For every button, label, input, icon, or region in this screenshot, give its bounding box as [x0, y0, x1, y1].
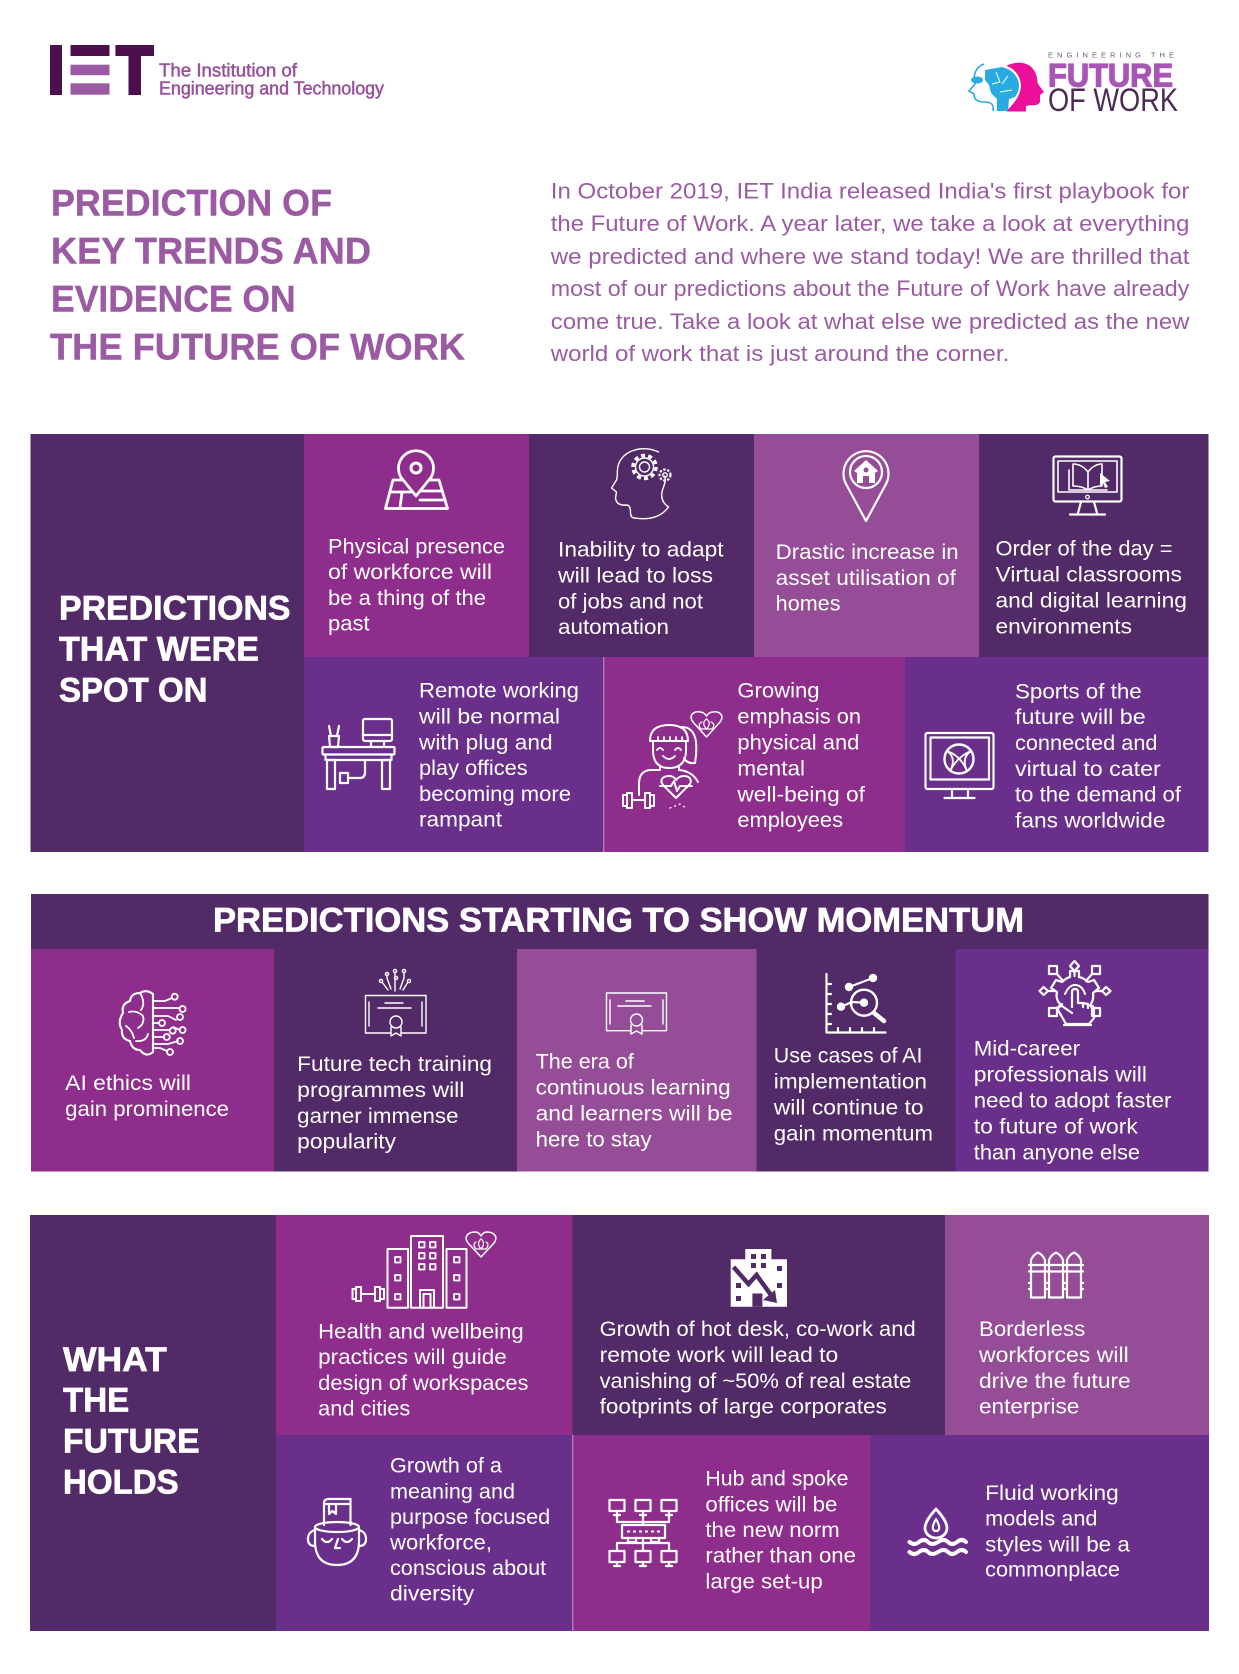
section heading: momentum: PREDICTIONS STARTING TO SHOW MOMENTUM [213, 902, 1024, 940]
icon: buildings with dumbbell and heart [352, 1232, 496, 1308]
card: well-being of employees: emphasis on [737, 706, 861, 729]
card: borderless workforces: enterprise [979, 1395, 1079, 1418]
intro paragraph: most of our predictions about the Future of Work have already [551, 276, 1189, 301]
intro paragraph: come true. Take a look at what else we predicted as the new [551, 309, 1190, 334]
card: continuous learning: The era of [536, 1050, 634, 1073]
card: mid-career professionals: Mid-career [974, 1038, 1080, 1061]
card: future tech training [274, 949, 517, 1172]
card: hub and spoke: Hub and spoke [705, 1468, 848, 1491]
card: hub and spoke [572, 1435, 870, 1631]
title: THE FUTURE OF WORK [50, 326, 465, 368]
card: borderless workforces: workforces will [978, 1344, 1129, 1367]
icon: circuit brain [120, 991, 186, 1055]
section label: future holds: HOLDS [63, 1463, 179, 1501]
card: meaning and purpose: meaning and [390, 1480, 515, 1503]
card: hot desk and co-work: footprints of large corporates [600, 1395, 887, 1418]
section label: spot on [30, 434, 304, 852]
card: hot desk and co-work: remote work will lead to [600, 1344, 838, 1367]
card: inability to adapt: will lead to loss [557, 564, 713, 587]
card: hub and spoke: rather than one [705, 1545, 856, 1568]
title: EVIDENCE ON [51, 278, 296, 320]
intro paragraph: In October 2019, IET India released India's first playbook for [551, 178, 1189, 204]
logo: Engineering the Future of Work: FUTURE [1048, 58, 1173, 94]
card: well-being of employees: mental [737, 757, 805, 780]
icon: building with falling arrow [731, 1249, 787, 1307]
card: hot desk and co-work: vanishing of ~50% of real estate [600, 1370, 911, 1393]
card: hub and spoke: offices will be [705, 1493, 837, 1516]
card: fluid working models: Fluid working [985, 1482, 1119, 1505]
card: remote working: becoming more [419, 783, 571, 806]
card: borderless workforces: Borderless [979, 1318, 1085, 1341]
card: sports of the future: to the demand of [1015, 784, 1181, 807]
card: remote working: play offices [419, 757, 528, 780]
card: inability to adapt: Inability to adapt [558, 539, 724, 562]
icon: gear with hand [1040, 961, 1110, 1025]
card: virtual classrooms: Virtual classrooms [996, 564, 1182, 587]
logo: Engineering the Future of Work: ENGINEERING THE [1048, 50, 1174, 59]
card: asset utilisation: Drastic increase in [776, 541, 959, 564]
card: inability to adapt: automation [558, 616, 669, 639]
intro paragraph: world of work that is just around the corner. [550, 341, 1009, 366]
card: health and wellbeing: design of workspaces [318, 1372, 528, 1395]
card: fluid working models [870, 1435, 1209, 1631]
card: physical presence [304, 434, 529, 657]
icon: monitor with basketball [926, 733, 994, 798]
panel: predictions that were spot on [30, 434, 1208, 852]
logo: IET [50, 45, 384, 99]
icon: certificate [606, 993, 666, 1034]
icon: fence [1029, 1252, 1083, 1298]
card: AI use cases: implementation [774, 1070, 927, 1093]
logo: IET: The Institution of [159, 61, 298, 81]
card: physical presence: Physical presence [328, 535, 505, 558]
card: virtual classrooms: and digital learning [996, 590, 1187, 613]
card: health and wellbeing: practices will guide [318, 1346, 507, 1369]
card: mid-career professionals [956, 949, 1208, 1172]
card: AI use cases: gain momentum [774, 1122, 933, 1145]
card: fluid working models: models and [985, 1508, 1098, 1531]
card: health and wellbeing [276, 1215, 572, 1435]
card: sports of the future: future will be [1015, 706, 1146, 729]
card: physical presence: of workforce will [328, 561, 492, 584]
card: meaning and purpose: diversity [390, 1583, 475, 1606]
title: PREDICTION OF [51, 182, 332, 224]
card: mid-career professionals: than anyone else [974, 1141, 1140, 1164]
card: meaning and purpose [276, 1435, 572, 1631]
card: sports of the future: fans worldwide [1015, 809, 1166, 832]
card: hub and spoke: large set-up [705, 1570, 823, 1593]
card: meaning and purpose: conscious about [390, 1557, 546, 1580]
section label: spot on: THAT WERE [59, 630, 259, 668]
card: fluid working models: styles will be a [985, 1534, 1130, 1557]
card: remote working: with plug and [418, 731, 553, 754]
card: hot desk and co-work [572, 1215, 945, 1435]
section heading: momentum [31, 894, 1208, 949]
card: hot desk and co-work: Growth of hot desk, co-work and [600, 1318, 916, 1341]
card: future tech training: programmes will [297, 1079, 464, 1102]
card: health and wellbeing: and cities [318, 1397, 410, 1420]
card: physical presence: be a thing of the [328, 587, 486, 610]
card: future tech training: garner immense [297, 1105, 458, 1128]
section label: spot on: SPOT ON [59, 671, 208, 709]
card: borderless workforces [945, 1215, 1209, 1435]
card: well-being of employees: Growing [737, 680, 820, 703]
icon: head with gears [612, 449, 670, 519]
card: fluid working models: commonplace [985, 1559, 1120, 1582]
title [50, 182, 465, 368]
icon: map pin [386, 451, 448, 508]
card: inability to adapt: of jobs and not [558, 590, 703, 613]
card: mid-career professionals: professionals will [974, 1063, 1147, 1086]
card: virtual classrooms: Order of the day = [996, 538, 1172, 561]
card: AI use cases: will continue to [773, 1096, 924, 1119]
card: meaning and purpose: Growth of a [390, 1454, 502, 1477]
card: sports of the future: connected and [1015, 732, 1158, 755]
card: sports of the future [905, 657, 1208, 852]
logo: IET: Engineering and Technology [159, 79, 384, 99]
card: meaning and purpose: purpose focused [390, 1506, 550, 1529]
icon: home pin [844, 451, 889, 521]
card: AI ethics: AI ethics will [65, 1072, 191, 1095]
title: KEY TRENDS AND [51, 230, 371, 272]
card: sports of the future: virtual to cater [1015, 758, 1161, 781]
card: continuous learning: here to stay [536, 1128, 652, 1151]
card: AI ethics [31, 949, 274, 1172]
intro paragraph: we predicted and where we stand today! We are thrilled that [550, 244, 1189, 269]
card: sports of the future: Sports of the [1015, 680, 1142, 703]
icon: water drop [910, 1509, 966, 1554]
card: mid-career professionals: need to adopt faster [974, 1089, 1171, 1112]
section label: future holds: THE [63, 1382, 129, 1420]
card: well-being of employees [603, 657, 905, 852]
card: inability to adapt [529, 434, 754, 657]
card: remote working: rampant [419, 809, 502, 832]
card: asset utilisation: asset utilisation of [776, 567, 956, 590]
card: remote working: will be normal [418, 705, 560, 728]
icon: desk [322, 719, 394, 789]
panel: what the future holds [30, 1215, 1209, 1631]
card: health and wellbeing: Health and wellbeing [318, 1320, 524, 1343]
card: well-being of employees: well-being of [736, 783, 865, 806]
card: AI ethics: gain prominence [65, 1098, 229, 1121]
card: AI use cases: Use cases of AI [774, 1044, 922, 1067]
icon: network of monitors [610, 1500, 676, 1566]
card: meaning and purpose: workforce, [389, 1531, 492, 1554]
logo: Engineering the Future of Work: OF WORK [1048, 82, 1178, 118]
card: remote working [304, 657, 604, 852]
section label: future holds: WHAT [63, 1341, 167, 1379]
card: hub and spoke: the new norm [705, 1519, 840, 1542]
icon: chart with magnifier [826, 974, 886, 1032]
section label: future holds: FUTURE [63, 1423, 200, 1461]
card: virtual classrooms [979, 434, 1208, 657]
card: future tech training: popularity [297, 1131, 397, 1154]
card: remote working: Remote working [419, 679, 579, 702]
card: physical presence: past [328, 613, 370, 636]
card: borderless workforces: drive the future [979, 1370, 1131, 1393]
card: well-being of employees: employees [737, 809, 843, 832]
card: mid-career professionals: to future of work [974, 1115, 1138, 1138]
intro paragraph: the Future of Work. A year later, we take a look at everything [551, 211, 1189, 236]
card: asset utilisation [754, 434, 979, 657]
icon: certificate with circuit [366, 969, 426, 1036]
section label: future holds [30, 1215, 276, 1631]
card: AI use cases [756, 949, 956, 1172]
logo: Engineering the Future of Work [969, 50, 1178, 118]
card: well-being of employees: physical and [737, 732, 859, 755]
card: continuous learning [517, 949, 756, 1172]
icon: woman with heart and dumbbell [623, 712, 722, 808]
card: future tech training: Future tech training [297, 1053, 492, 1076]
icon: monitor with book [1054, 456, 1122, 514]
section label: spot on: PREDICTIONS [59, 589, 290, 627]
card: virtual classrooms: environments [996, 615, 1132, 638]
card: asset utilisation: homes [776, 593, 840, 616]
icon: head with book [308, 1499, 366, 1565]
panel: predictions starting to show momentum [31, 894, 1208, 1172]
card: continuous learning: continuous learning [536, 1076, 731, 1099]
intro paragraph [550, 178, 1190, 366]
card: continuous learning: and learners will be [536, 1102, 733, 1125]
